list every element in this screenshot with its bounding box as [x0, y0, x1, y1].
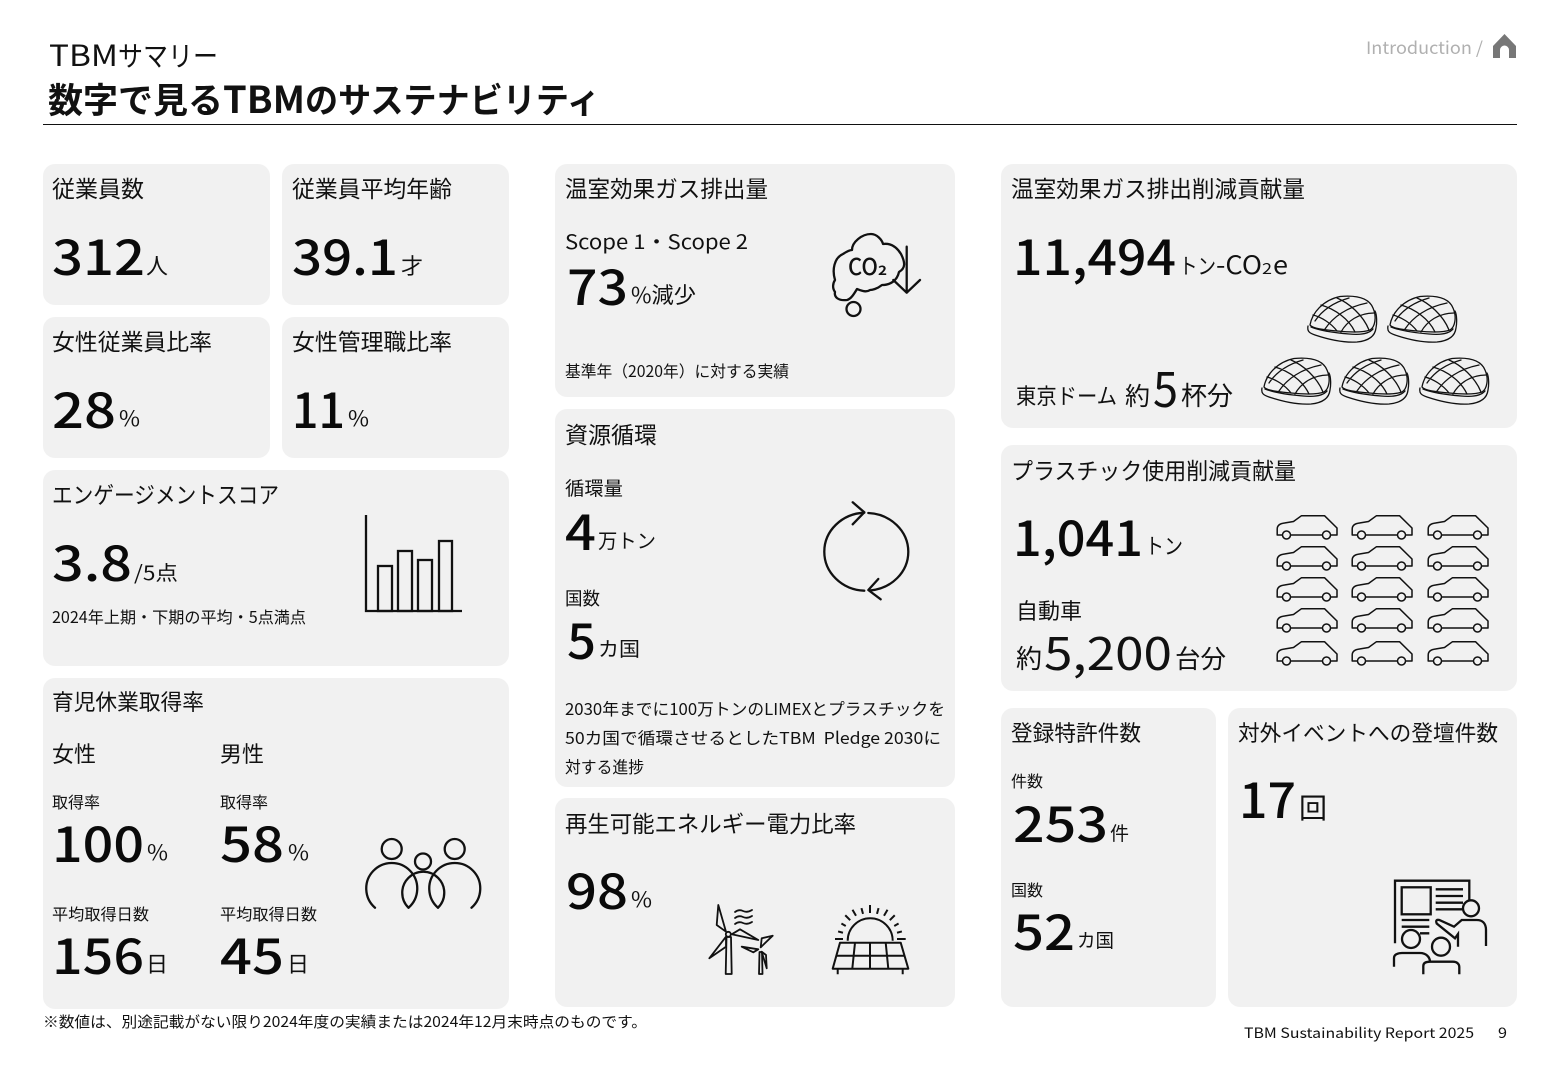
- icon: family: [366, 839, 480, 908]
- note: 2024年上期・下期の平均・5点満点: [52, 604, 306, 628]
- unit: 日: [146, 947, 168, 979]
- unit: %: [348, 403, 369, 433]
- label: 女性平均取得日数: 平均取得日数: [52, 901, 149, 925]
- heading: 登録特許件数: [1011, 716, 1141, 748]
- heading: 対外イベントへの登壇件数: [1238, 716, 1498, 748]
- icon: cycle arrows: [824, 502, 908, 599]
- unit: トン-CO2e: 2: [1262, 258, 1272, 279]
- heading: 従業員数: [52, 170, 144, 204]
- title: 数字で見るTBMのサステナビリティ: 数字で見る: [48, 73, 223, 124]
- value: 11: [292, 372, 345, 442]
- footer: page number: 9: [1498, 1023, 1507, 1043]
- footnote: ※数値は、別途記載がない限り2024年度の実績または2024年12月末時点のものです。: [43, 1011, 647, 1032]
- description: [565, 696, 945, 778]
- value: 1,041: [1013, 500, 1143, 570]
- comparison: 東京ドーム約5杯分: 5: [1153, 351, 1178, 421]
- panel: 対外イベントへの登壇件数: [1228, 708, 1517, 1007]
- unit: %: [631, 884, 652, 914]
- panel: 女性管理職比率: [282, 317, 509, 458]
- comparison: 自動車約5,200台分: 約: [1016, 639, 1042, 676]
- label: 女性: 女性: [52, 737, 96, 769]
- panel: エンゲージメントスコア: [43, 470, 509, 666]
- heading: 温室効果ガス排出削減貢献量: [1011, 170, 1305, 204]
- unit: %減少: [631, 278, 696, 310]
- comparison: 自動車約5,200台分: 台分: [1175, 639, 1226, 676]
- value: 52: [1013, 894, 1075, 964]
- heading: 女性従業員比率: [52, 323, 212, 357]
- label: 男性取得率: 取得率: [220, 789, 268, 813]
- value: 3.8: [52, 525, 132, 595]
- heading: 女性管理職比率: [292, 323, 452, 357]
- panel: 従業員平均年齢: [282, 164, 509, 305]
- unit: トン-CO2e: -CO: [1216, 246, 1262, 282]
- label: 女性取得率: 取得率: [52, 789, 100, 813]
- value: 98: [566, 853, 628, 923]
- unit: /5点: [134, 557, 178, 586]
- value: 312: [52, 219, 145, 289]
- label: scope: Scope 1・Scope 2: [565, 226, 748, 255]
- description: 2030年までに100万トンのLIMEXとプラスチックを: [565, 696, 945, 720]
- heading: 従業員平均年齢: [292, 170, 452, 204]
- heading: 育児休業取得率: [52, 685, 204, 717]
- note: 基準年（2020年）に対する実績: [565, 358, 789, 382]
- label: 国数: 国数: [1011, 877, 1043, 901]
- heading: 再生可能エネルギー電力比率: [565, 805, 856, 839]
- unit: トン-CO2e: トン: [1179, 249, 1216, 281]
- description: 50カ国で循環させるとしたTBM Pledge 2030に: [565, 725, 941, 749]
- panel: 温室効果ガス排出量: [555, 164, 955, 397]
- icon: fifteen cars: [1277, 516, 1488, 665]
- page header: [43, 33, 1517, 125]
- comparison: 自動車約5,200台分: 5,200: [1044, 618, 1172, 683]
- value: 28: [52, 372, 116, 442]
- unit: 万トン: [598, 525, 656, 554]
- footer: report name: TBM Sustainability Report 2025: [1244, 1023, 1474, 1043]
- description: 対する進捗: [565, 754, 644, 778]
- unit: %: [147, 837, 168, 867]
- panel: 再生可能エネルギー電力比率: [555, 798, 955, 1007]
- icon: presenter and audience: [1394, 881, 1486, 974]
- unit: 日: [287, 947, 309, 979]
- title: TBMサマリー: サマリー: [118, 35, 218, 75]
- comparison: 東京ドーム約5杯分: 約: [1125, 377, 1150, 413]
- comparison: 自動車約5,200台分: 自動車: [1016, 594, 1082, 626]
- panel: 女性従業員比率: [43, 317, 270, 458]
- value: 45: 45: [220, 918, 284, 988]
- heading: エンゲージメントスコア: [52, 476, 279, 510]
- unit: カ国: [1077, 926, 1114, 953]
- title: TBMサマリー: TBM: [49, 33, 118, 75]
- unit: 回: [1299, 787, 1327, 827]
- panel: 育児休業取得率: [43, 678, 509, 1009]
- icon: five Tokyo Domes: [1262, 296, 1489, 404]
- icon: CO2 cloud: CO: [848, 248, 878, 282]
- label: 件数: 件数: [1011, 768, 1043, 792]
- unit: %: [288, 837, 309, 867]
- value: 17: [1239, 762, 1296, 832]
- value: 5: 5: [567, 603, 596, 673]
- heading: プラスチック使用削減貢献量: [1011, 452, 1296, 486]
- unit: %: [119, 403, 140, 433]
- heading: 資源循環: [565, 416, 657, 450]
- icon: CO2 cloud: [833, 234, 920, 316]
- value: 58: 58: [220, 806, 284, 876]
- label: 循環量: 循環量: [565, 474, 623, 501]
- comparison: 東京ドーム約5杯分: 杯分: [1181, 376, 1233, 413]
- unit: 人: [146, 249, 168, 281]
- unit: 件: [1110, 819, 1129, 846]
- comparison: 東京ドーム約5杯分: [1016, 351, 1233, 421]
- value: 4: 4: [565, 494, 596, 564]
- label: 男性: 男性: [220, 737, 264, 769]
- value: 39.1: [292, 219, 398, 289]
- breadcrumb: Introduction: Introduction /: [1366, 34, 1483, 59]
- value: 253: [1013, 786, 1108, 856]
- icon: CO2 cloud: 2: [878, 260, 887, 279]
- panel: プラスチック使用削減貢献量: [1001, 445, 1517, 691]
- unit: トン: [1145, 529, 1183, 561]
- title: 数字で見るTBMのサステナビリティ: のサステナビリティ: [305, 73, 600, 124]
- unit: カ国: [598, 633, 640, 662]
- value: 73: [567, 249, 628, 319]
- value: 11,494: [1013, 219, 1176, 289]
- panel: 資源循環: [555, 409, 955, 787]
- icon: home: [1493, 34, 1516, 58]
- comparison: 東京ドーム約5杯分: 東京ドーム: [1016, 379, 1117, 411]
- icon: solar panel: [833, 905, 908, 974]
- title: TBMサマリー: [49, 33, 218, 75]
- unit: トン-CO2e: e: [1273, 246, 1288, 282]
- unit: 才: [401, 249, 423, 281]
- icon: bar chart: [366, 515, 462, 611]
- panel: 登録特許件数: [1001, 708, 1216, 1007]
- label: 国数: 国数: [565, 585, 600, 611]
- unit: トン-CO2e: [1179, 246, 1288, 282]
- value: 156: 156: [52, 918, 144, 988]
- heading: 温室効果ガス排出量: [565, 170, 768, 204]
- value: 100: 100: [52, 806, 144, 876]
- panel: 従業員数: [43, 164, 270, 305]
- title: 数字で見るTBMのサステナビリティ: TBM: [223, 70, 305, 124]
- panel: 温室効果ガス排出削減貢献量: [1001, 164, 1517, 428]
- title: 数字で見るTBMのサステナビリティ: [48, 70, 600, 124]
- comparison: 自動車約5,200台分: [1016, 594, 1226, 683]
- label: 男性平均取得日数: 平均取得日数: [220, 901, 317, 925]
- icon: wind turbines: [709, 905, 773, 974]
